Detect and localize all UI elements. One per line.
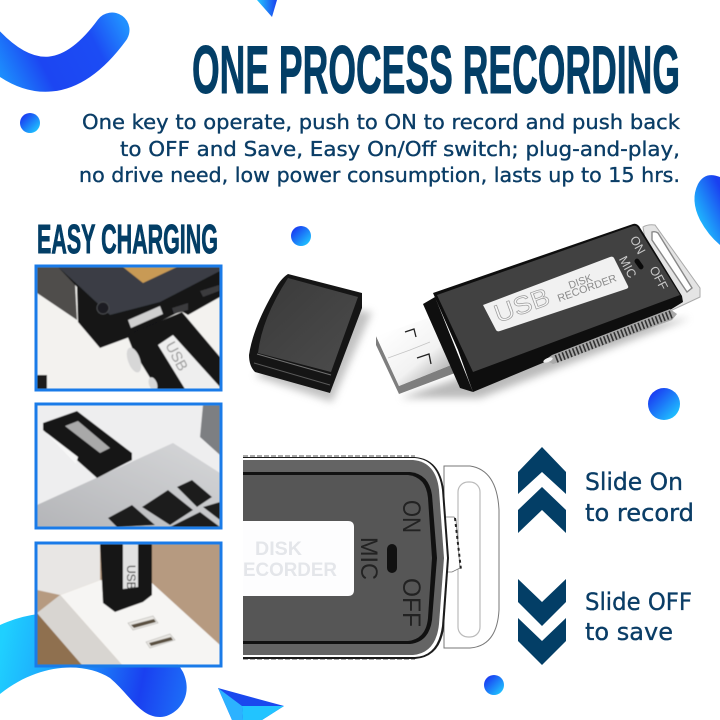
heading: easy charging: EASY CHARGING xyxy=(37,216,218,262)
loop metal xyxy=(643,225,700,312)
zoomed detail of recorder switch end: ECORDER xyxy=(243,560,337,581)
decorative swoosh: right edge xyxy=(694,175,720,245)
USB recorder body: MIC xyxy=(616,254,639,281)
label: slide off to save: to save xyxy=(585,618,673,646)
USB plug metal xyxy=(376,318,455,394)
label: slide on to record xyxy=(585,468,694,527)
USB recorder body: OFF xyxy=(646,264,671,293)
grip ribs xyxy=(543,309,677,364)
photo panel: plugged into device: USB xyxy=(161,339,191,374)
description text block xyxy=(79,110,680,187)
key loop xyxy=(444,466,499,648)
USB recorder cap xyxy=(249,274,372,402)
white label xyxy=(243,521,354,596)
label: slide on to record: Slide On xyxy=(585,468,683,496)
photo panel: plugged into power strip: USB xyxy=(124,565,138,590)
silver label xyxy=(483,257,628,331)
label: slide off to save xyxy=(585,588,692,646)
zoomed detail of recorder switch end: ON xyxy=(397,500,425,533)
zoomed detail of recorder switch end: DISK xyxy=(255,539,302,560)
description text block: no drive need, low power consumption, lasts up to 15 hrs. xyxy=(79,163,680,187)
decorative dot: bottom xyxy=(484,675,504,695)
decorative swoosh: top left xyxy=(0,30,112,74)
decorative dot: left of text xyxy=(20,113,40,133)
decorative dot: below USB xyxy=(648,388,680,420)
neck xyxy=(423,297,473,392)
photo panel: plugged into power strip xyxy=(36,543,221,666)
photo panel: plugged into device xyxy=(36,266,221,392)
decorative swoosh: bottom left xyxy=(0,612,187,717)
arrows: slide up xyxy=(518,447,566,533)
USB recorder body: ON xyxy=(627,234,648,257)
zoomed detail of recorder switch end xyxy=(243,456,499,659)
description text block: to OFF and Save, Easy On/Off switch; plug-and-play, xyxy=(120,137,680,161)
mic slot xyxy=(387,544,397,573)
USB recorder body: RECORDER xyxy=(556,272,619,305)
USB recorder body: USB xyxy=(490,283,554,329)
zoomed detail of recorder switch end: OFF xyxy=(397,578,425,627)
label: slide on to record: to record xyxy=(585,499,694,527)
label: slide off to save: Slide OFF xyxy=(585,588,692,616)
body shell xyxy=(433,224,683,392)
zoomed detail of recorder switch end: MIC xyxy=(355,537,382,580)
decorative dot: above USB cap xyxy=(291,226,311,246)
decorative triangle: top xyxy=(257,0,277,17)
USB recorder body xyxy=(376,224,700,398)
photo panel: plugged into laptop xyxy=(36,404,221,528)
description text block: One key to operate, push to ON to record and push back xyxy=(82,110,680,134)
decorative triangle: bottom xyxy=(218,688,284,720)
arrows: slide down xyxy=(518,579,566,665)
USB recorder body: DISK xyxy=(567,272,594,292)
